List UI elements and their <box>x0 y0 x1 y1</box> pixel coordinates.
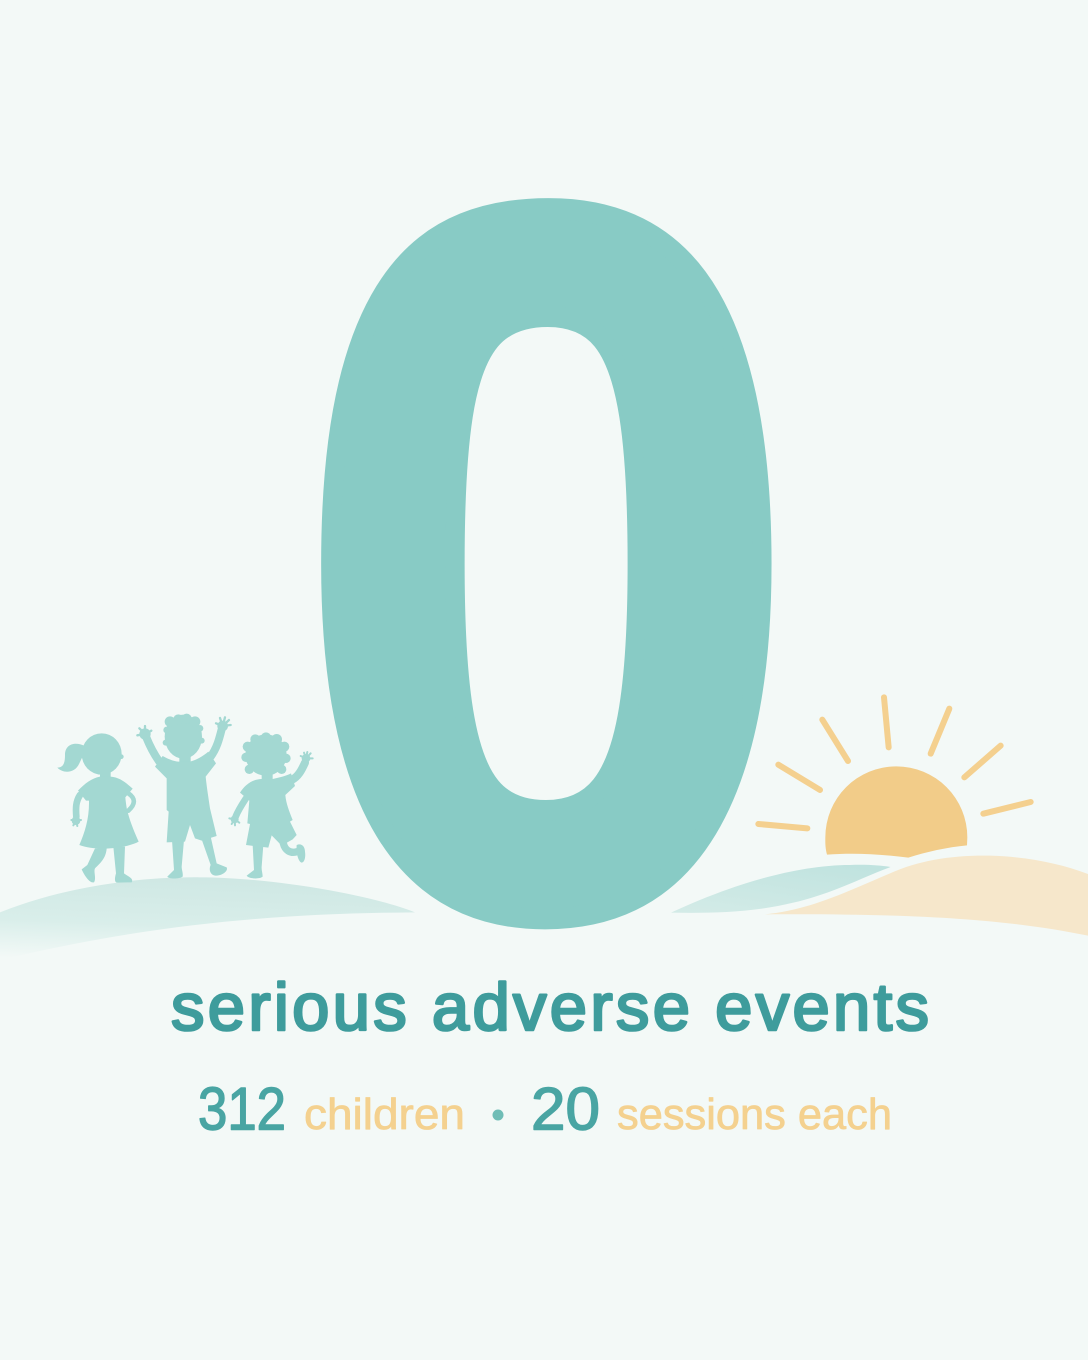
big number zero: 0 <box>295 1 799 1122</box>
teal hill beside the sun <box>671 865 891 913</box>
heading: serious adverse events <box>171 970 929 1045</box>
label: sessions each: sessions each <box>617 1090 892 1139</box>
stat line <box>198 1076 892 1142</box>
stat: 312: 312 <box>198 1076 286 1142</box>
stat: 20: 20 <box>531 1076 600 1142</box>
peach hill <box>765 856 1088 936</box>
children silhouettes <box>57 714 313 883</box>
icon: rising sun <box>758 697 1031 858</box>
child: curly hair boy waving <box>229 732 313 878</box>
left hill <box>0 877 415 960</box>
child: boy with raised arms <box>137 714 231 879</box>
label: children: children <box>304 1090 465 1139</box>
sun rays <box>758 697 1031 828</box>
separator dot <box>492 1110 504 1120</box>
sun disc <box>825 766 967 858</box>
child: girl with ponytail <box>57 733 139 883</box>
